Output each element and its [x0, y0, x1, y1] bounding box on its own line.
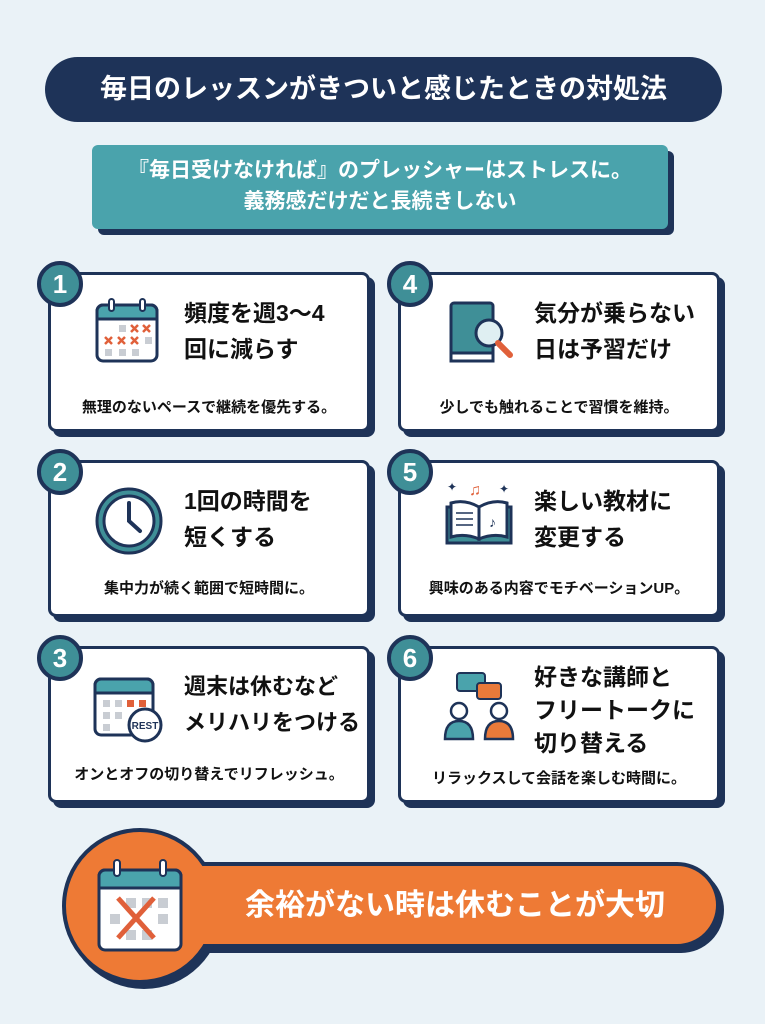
heading	[184, 674, 360, 735]
number 3: 3	[53, 643, 67, 673]
icon: calendar rest	[94, 678, 162, 742]
icon: calendar with cross	[98, 859, 182, 952]
heading: 切り替える	[534, 730, 648, 756]
number 3	[37, 635, 83, 681]
number 6: 6	[403, 643, 417, 673]
number 2: 2	[53, 457, 67, 487]
heading: 週末は休むなど	[184, 674, 338, 699]
heading: 好きな講師と	[534, 664, 672, 690]
icon: book with notes: ✦	[499, 482, 509, 496]
heading	[534, 488, 672, 550]
number 5	[387, 449, 433, 495]
heading: メリハリをつける	[184, 710, 360, 735]
title: 毎日のレッスンがきついと感じたときの対処法	[100, 74, 667, 104]
number 4: 4	[403, 269, 417, 299]
number 4	[387, 261, 433, 307]
heading: 短くする	[184, 524, 276, 550]
banner circle	[62, 828, 218, 984]
icon: book with notes: ♫	[469, 482, 481, 499]
heading: 変更する	[534, 524, 626, 550]
card 3	[48, 646, 370, 803]
banner bar	[150, 862, 720, 948]
banner text: 余裕がない時は休むことが大切	[245, 889, 665, 922]
subtitle box: 義務感だけだと長続きしない	[244, 190, 516, 213]
description: 集中力が続く範囲で短時間に。	[104, 580, 314, 597]
icon: calendar with x marks	[96, 298, 158, 362]
heading: 頻度を週3～4	[184, 300, 325, 326]
card 2	[48, 460, 370, 617]
subtitle box	[92, 145, 668, 229]
icon: book with notes	[446, 480, 512, 544]
description: リラックスして会話を楽しむ時間に。	[432, 770, 686, 787]
description: 少しでも触れることで習慣を維持。	[439, 399, 679, 416]
heading: フリートークに	[534, 697, 695, 723]
card 6	[398, 646, 720, 803]
card 1	[48, 272, 370, 432]
heading	[534, 664, 695, 756]
heading: 日は予習だけ	[534, 336, 672, 362]
number 6	[387, 635, 433, 681]
heading: 気分が乗らない	[534, 300, 695, 326]
heading	[184, 300, 325, 362]
number 5: 5	[403, 457, 417, 487]
description: オンとオフの切り替えでリフレッシュ。	[74, 766, 344, 783]
heading: 回に減らす	[184, 336, 299, 362]
icon: clock	[96, 488, 162, 554]
heading: 1回の時間を	[184, 488, 312, 514]
number 2	[37, 449, 83, 495]
heading	[534, 300, 695, 362]
heading	[184, 488, 312, 550]
icon: book with magnifier	[450, 302, 513, 362]
card 5	[398, 460, 720, 617]
bottom banner	[62, 828, 724, 989]
card 4	[398, 272, 720, 432]
description: 興味のある内容でモチベーションUP。	[429, 580, 689, 597]
number 1	[37, 261, 83, 307]
description: 無理のないペースで継続を優先する。	[82, 399, 336, 416]
icon: book with notes: ✦	[447, 480, 457, 494]
title	[45, 57, 722, 122]
icon: book with notes: ♪	[489, 514, 496, 530]
number 1: 1	[53, 269, 67, 299]
heading: 楽しい教材に	[534, 488, 672, 514]
subtitle box: 『毎日受けなければ』のプレッシャーはストレスに。	[128, 159, 632, 182]
icon: calendar rest: REST	[132, 721, 158, 732]
icon: two people talking	[444, 672, 514, 740]
